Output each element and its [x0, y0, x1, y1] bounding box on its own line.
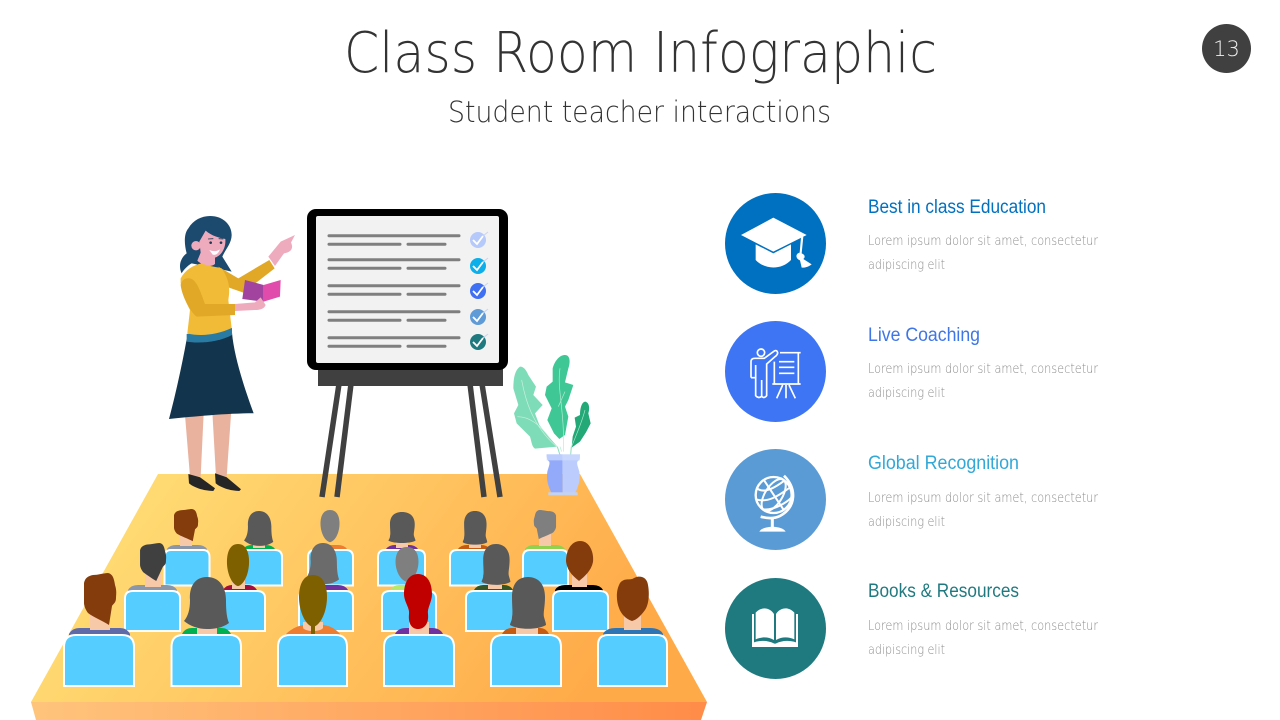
student back 2	[236, 511, 282, 586]
item: Global Recognition	[725, 449, 1099, 550]
student middle 3	[299, 543, 353, 631]
board frame	[307, 209, 508, 370]
plant in vase	[513, 355, 591, 495]
skirt	[169, 333, 254, 419]
icon: teacher at board	[725, 321, 826, 422]
check marks	[470, 232, 488, 350]
easel shelf	[318, 369, 503, 386]
student middle 4	[382, 547, 436, 631]
student middle 6	[553, 541, 608, 631]
description: adipiscing elit	[868, 258, 945, 273]
icon: graduation cap	[725, 193, 826, 294]
title: Class Room Infographic	[344, 21, 937, 86]
heading: Live Coaching	[868, 325, 980, 346]
student middle 2	[210, 544, 265, 631]
subtitle: Student teacher interactions	[448, 95, 831, 129]
icon: open book	[725, 578, 826, 679]
description: Lorem ipsum dolor sit amet, consectetur	[868, 619, 1099, 634]
middle row students	[125, 541, 608, 631]
heading: Global Recognition	[868, 453, 1019, 474]
student front 5	[491, 577, 561, 686]
student back 5	[450, 511, 496, 586]
item: Live Coaching	[725, 321, 1099, 422]
student back 6	[523, 510, 568, 586]
eyes and smile	[208, 239, 223, 255]
description: Lorem ipsum dolor sit amet, consectetur	[868, 234, 1099, 249]
easel legs	[322, 384, 500, 497]
lower arm sleeve	[181, 278, 235, 317]
page number badge: 13	[1213, 37, 1240, 61]
description: Lorem ipsum dolor sit amet, consectetur	[868, 491, 1099, 506]
shoes	[188, 473, 241, 491]
student back 4	[378, 512, 425, 586]
student front 3	[278, 575, 347, 686]
item: Best in class Education	[725, 193, 1099, 294]
board surface	[316, 216, 499, 363]
student front 6	[598, 577, 667, 686]
raised arm skin	[268, 235, 295, 266]
book	[242, 280, 264, 302]
description: adipiscing elit	[868, 515, 945, 530]
heading: Books & Resources	[868, 581, 1019, 602]
front row students	[64, 573, 667, 686]
checklist lines	[329, 236, 459, 346]
description: adipiscing elit	[868, 386, 945, 401]
heading: Best in class Education	[868, 197, 1046, 218]
teacher	[169, 216, 295, 491]
classroom floor	[31, 474, 707, 720]
hair	[180, 216, 232, 273]
back row students	[164, 509, 568, 586]
student front 2	[172, 577, 241, 686]
student front 4	[384, 574, 454, 686]
student middle 5	[466, 544, 521, 631]
face	[191, 231, 225, 266]
presentation board	[307, 209, 508, 497]
sweater	[181, 263, 232, 335]
student middle 1	[125, 543, 180, 631]
legs	[185, 410, 231, 477]
student back 1	[164, 509, 210, 586]
description: adipiscing elit	[868, 643, 945, 658]
hand with book	[235, 297, 266, 311]
student front 1	[64, 573, 134, 686]
description: Lorem ipsum dolor sit amet, consectetur	[868, 362, 1099, 377]
student back 3	[308, 510, 353, 586]
page number badge	[1202, 24, 1251, 73]
raised sleeve	[218, 260, 275, 293]
item: Books & Resources	[725, 578, 1099, 679]
belt	[187, 328, 232, 343]
icon: globe	[725, 449, 826, 550]
